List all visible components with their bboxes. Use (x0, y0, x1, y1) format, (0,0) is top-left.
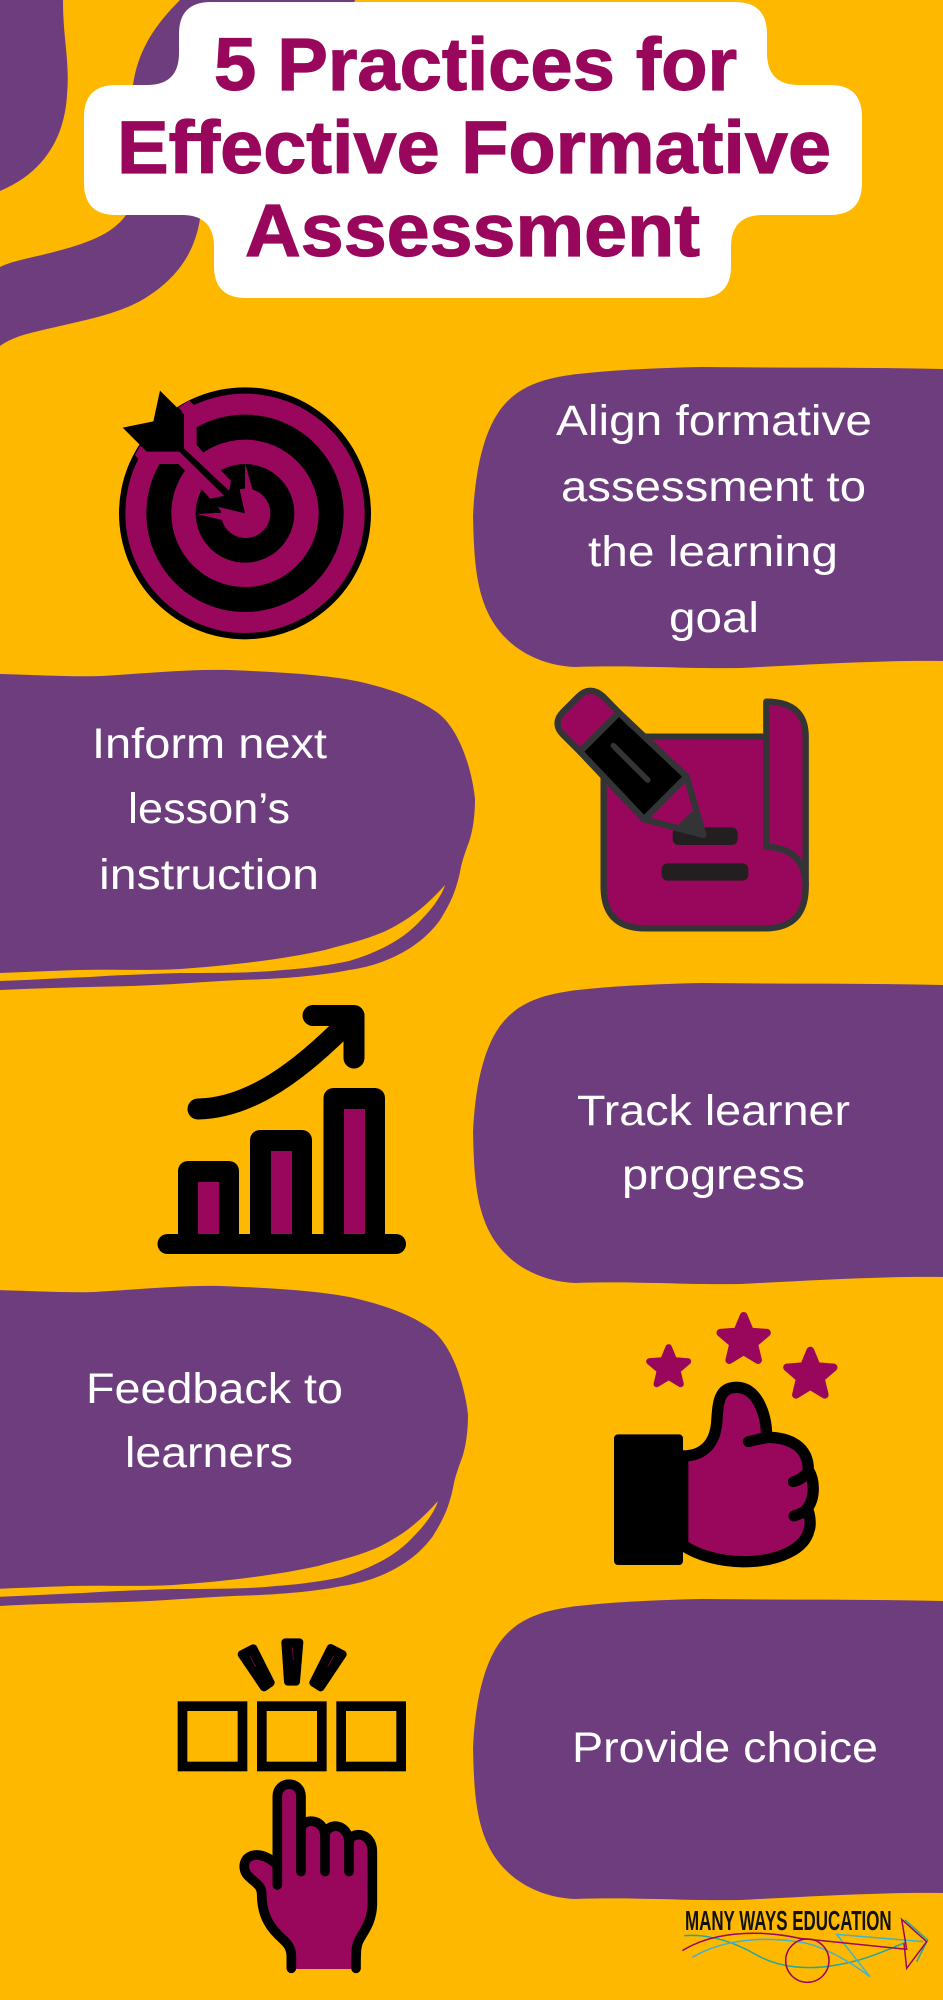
panel text: track (577, 1087, 850, 1199)
panel text: track: Track learner (577, 1087, 850, 1135)
panel text: inform: instruction (99, 851, 319, 899)
icon: target with arrow (119, 387, 371, 639)
title text (117, 23, 831, 272)
panel text: align: assessment to (561, 463, 866, 511)
title background (84, 2, 862, 298)
logo: Many Ways Education (682, 1905, 928, 1982)
panel: track learner progress (473, 983, 943, 1284)
icon: thumbs up with stars (614, 1316, 834, 1565)
title (84, 2, 862, 298)
panel text: feedback (86, 1365, 343, 1477)
title text: 5 Practices for (214, 23, 737, 106)
panel text: feedback: Feedback to (86, 1365, 343, 1413)
panel text: inform: lesson’s (128, 785, 290, 833)
panel: provide choice (473, 1599, 943, 1900)
panel text: align: Align formative (556, 397, 872, 445)
panel text: feedback: learners (125, 1429, 293, 1477)
panel text: provide choice: Provide choice (572, 1724, 878, 1772)
decorative wave: top-left swoosh (0, 0, 355, 346)
panel text: align: goal (669, 594, 759, 642)
panel: inform next lesson's instruction (0, 670, 475, 990)
decorative wave: top-left corner blob (0, 0, 68, 191)
panel text: inform: Inform next (92, 720, 327, 768)
panel text: align (556, 397, 872, 642)
icon: stars (649, 1316, 834, 1395)
icon: three boxes (182, 1706, 401, 1766)
icon: hand choosing from three boxes (182, 1642, 401, 1969)
panel text: align: the learning (588, 528, 838, 576)
panel text: track: progress (622, 1151, 805, 1199)
title text: Effective Formative (117, 106, 831, 189)
title text: Assessment (245, 189, 700, 272)
panel: feedback to learners (0, 1286, 468, 1606)
panel text: inform (92, 720, 327, 899)
panel: align formative assessment (473, 367, 943, 668)
icon: burst marks (242, 1642, 343, 1687)
icon: pencil and paper (557, 691, 806, 928)
icon: bar chart with rising arrow (158, 1016, 406, 1254)
